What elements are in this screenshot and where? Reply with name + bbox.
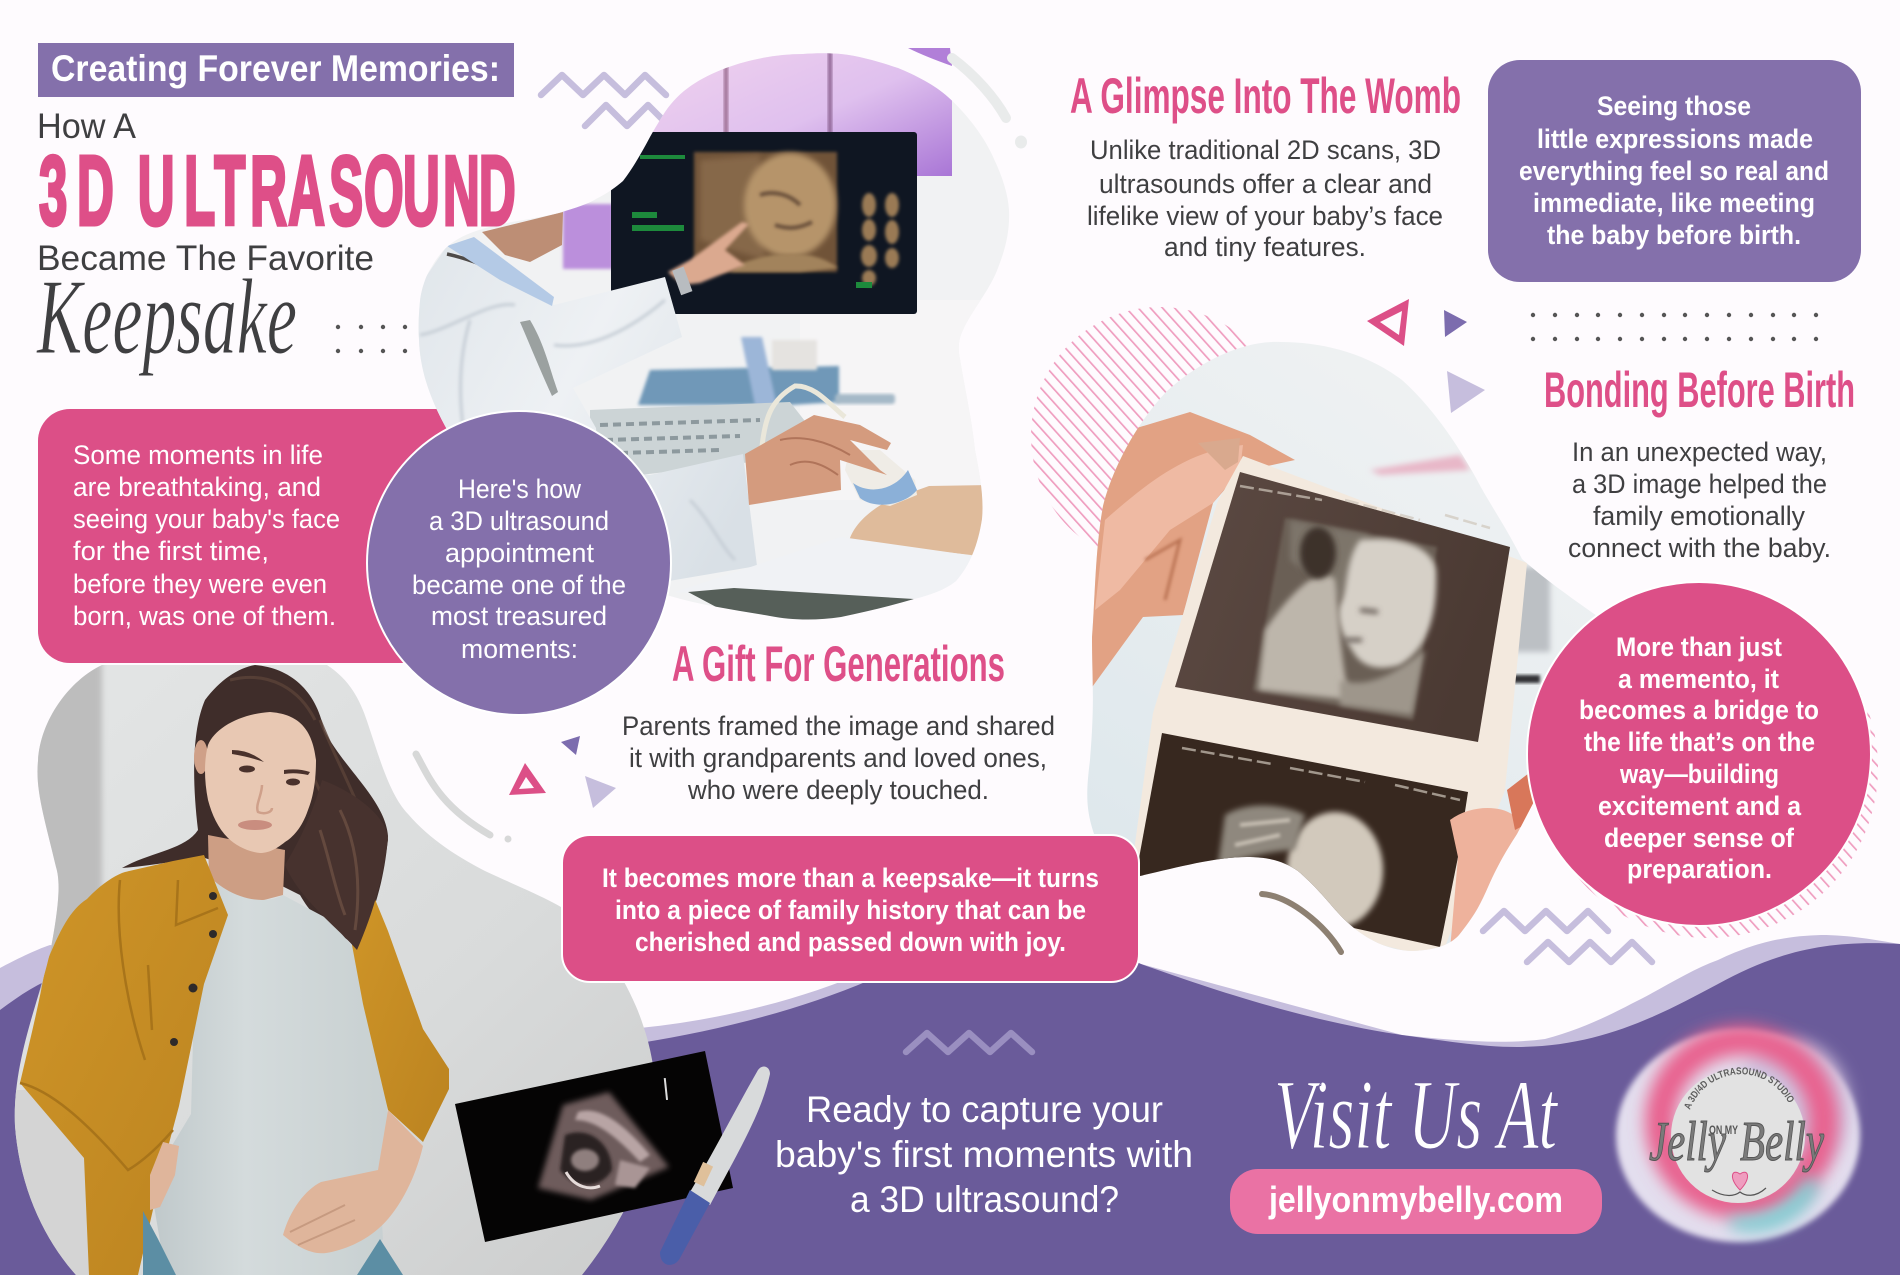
section: Bonding Before Birth: connect with the baby. [1568, 533, 1831, 563]
quote box: Seeing those little expressions: Seeing those [1597, 91, 1751, 121]
section: A Gift For Generations: Parents framed the image and shared [622, 711, 1055, 741]
website pill: jellyonmybelly.com [1268, 1179, 1563, 1220]
baby face top [1339, 539, 1436, 668]
jacket buttons [170, 892, 217, 1046]
title: Became The Favorite: Became The Favorite [37, 239, 374, 278]
zigzag footer [906, 1033, 1032, 1052]
section: Bonding Before Birth [1544, 362, 1855, 563]
cable [762, 386, 845, 446]
hair strands [230, 676, 356, 797]
purple circle callout: became one of the [412, 570, 626, 600]
triangles top right [1367, 299, 1485, 413]
section: A Gift For Generations: A Gift For Generations [672, 636, 1005, 692]
intro text: for the first time, [73, 536, 269, 566]
script: Visit Us At: Visit Us At [1274, 1059, 1558, 1170]
baby face bottom [1287, 812, 1383, 928]
pink circle callout: the life that’s on the [1584, 727, 1815, 757]
triangles center [509, 736, 616, 808]
pink circle callout: More than just [1616, 632, 1782, 662]
lavender wave [0, 900, 1900, 1100]
hand on belly [283, 1110, 423, 1253]
title: 3D ULTRASOUND: 3D ULTRASOUND [39, 135, 516, 246]
section: Bonding Before Birth: In an unexpected way, [1572, 437, 1827, 467]
footer call to action: Ready to capture your [806, 1089, 1163, 1130]
doctor neck [482, 212, 563, 262]
intro text: before they were even [73, 569, 327, 599]
logo: Jelly On My Belly: Belly [1740, 1111, 1824, 1173]
purple footer wave [0, 900, 1900, 1275]
decorative curve and dot center [416, 754, 512, 842]
footer call to action [775, 1089, 1193, 1220]
photo: ultrasound print [455, 1051, 733, 1242]
section: Bonding Before Birth: family emotionally [1593, 501, 1805, 531]
paper [1130, 456, 1527, 960]
hair back [122, 665, 388, 948]
hair front [318, 788, 388, 950]
intro text: seeing your baby's face [73, 504, 340, 534]
zigzag top [541, 75, 669, 126]
section: A Gift For Generations [622, 636, 1055, 805]
intro text: are breathtaking, and [73, 472, 321, 502]
intro text [73, 440, 340, 631]
logo: Jelly On My Belly: A 3D/4D ULTRASOUND STUDIO [1684, 1067, 1794, 1110]
coat shading [420, 300, 735, 560]
quote box: Seeing those little expressions: everything feel so real and [1519, 156, 1829, 186]
quote box: Seeing those little expressions: the baby before birth. [1547, 220, 1801, 250]
title: How A: How A [37, 107, 137, 146]
section: A Gift For Generations: it with grandparents and loved ones, [629, 743, 1047, 773]
ear [194, 740, 208, 774]
top scan [1175, 472, 1510, 742]
pink circle callout: a memento, it [1618, 664, 1779, 694]
pink circle callout: deeper sense of [1604, 823, 1795, 853]
logo: Jelly On My Belly: Jelly [1649, 1111, 1726, 1173]
title band: Creating Forever Memories: [51, 48, 500, 89]
sheet [751, 538, 964, 567]
section: A Gift For Generations: who were deeply touched. [687, 775, 989, 805]
panel: intro text [38, 409, 478, 663]
facial features [232, 750, 310, 786]
jacket folds [20, 880, 218, 1170]
section: A Glimpse Into The Womb [1070, 68, 1461, 262]
jeans [143, 1211, 176, 1275]
hand on probe [745, 415, 891, 505]
hatched circle behind the pink circle [1538, 598, 1878, 938]
pink keepsake box: into a piece of family history that can be [615, 895, 1086, 925]
stand [740, 335, 776, 404]
decorative arc and dot top [952, 58, 1027, 148]
purple circle callout: moments: [461, 634, 578, 664]
zigzag bottom right [1483, 911, 1652, 962]
pink keepsake box: It becomes more than a keepsake—it turns [602, 863, 1099, 893]
monitor [611, 132, 917, 314]
pink circle callout [1527, 582, 1871, 926]
pointing hand [668, 222, 749, 285]
monitor 3D image [694, 152, 837, 272]
hatched circle behind the right photo [1031, 307, 1289, 565]
stethoscope strap [446, 252, 476, 265]
dark cloth [688, 588, 914, 620]
footer call to action: baby's first moments with [775, 1134, 1193, 1175]
purple circle callout [367, 411, 671, 715]
quote box: Seeing those little expressions: little expressions made [1537, 124, 1813, 154]
pink circle callout: way—building [1619, 759, 1779, 789]
purple circle callout: a 3D ultrasound [429, 506, 609, 536]
purple circle callout: most treasured [431, 601, 607, 631]
shirt [150, 879, 388, 1275]
face [205, 712, 316, 853]
collar [447, 237, 554, 306]
monitor thumbnails [861, 193, 899, 286]
purple corner of the top photo [908, 48, 952, 66]
title: Keepsake script: Keepsake [36, 258, 297, 377]
lilac wall panels [650, 40, 952, 176]
pink circle callout: excitement and a [1598, 791, 1802, 821]
probe [845, 450, 917, 506]
jacket right [352, 887, 449, 1142]
purple circle callout: Here's how [458, 474, 581, 504]
belly [850, 485, 982, 556]
neck [208, 835, 285, 905]
decorative arc under right photo [1262, 894, 1341, 952]
dots near Keepsake [336, 325, 407, 353]
section: A Glimpse Into The Womb: ultrasounds offer a clear and [1099, 169, 1432, 199]
intro text: Some moments in life [73, 440, 323, 470]
thumb bottom right [1450, 790, 1540, 950]
hand left [1090, 412, 1295, 690]
doctor coat [418, 246, 757, 580]
logo: Jelly On My Belly [1612, 1014, 1864, 1246]
pink keepsake box: cherished and passed down with joy. [635, 927, 1066, 957]
quote box: Seeing those little expressions [1488, 60, 1861, 282]
monitor green bars [632, 155, 872, 288]
jacket left [20, 855, 228, 1275]
pink circle callout: becomes a bridge to [1579, 695, 1819, 725]
keyboard [590, 402, 808, 475]
footer call to action: a 3D ultrasound? [850, 1179, 1119, 1220]
section: A Glimpse Into The Womb: Unlike traditional 2D scans, 3D [1090, 135, 1441, 165]
dot grid top right [1531, 313, 1818, 341]
section: A Glimpse Into The Womb: A Glimpse Into The Womb [1070, 68, 1461, 124]
pink keepsake box [562, 835, 1139, 982]
pink circle callout: preparation. [1627, 854, 1772, 884]
quote box: Seeing those little expressions: immediate, like meeting [1533, 188, 1815, 218]
photo: pregnant woman [0, 660, 670, 1275]
section: Bonding Before Birth: a 3D image helped the [1572, 469, 1827, 499]
purple circle callout: appointment [445, 538, 594, 568]
website pill [1230, 1169, 1602, 1234]
logo: Jelly On My Belly: ON MY [1709, 1123, 1738, 1137]
intro text: born, was one of them. [73, 601, 336, 631]
icon: pregnancy test [660, 1067, 770, 1265]
photo: doctor performing ultrasound [418, 53, 1009, 620]
photo: hands holding ultrasound prints [1087, 342, 1596, 951]
bottom scan [1135, 733, 1468, 947]
section: A Glimpse Into The Womb: and tiny features. [1164, 232, 1366, 262]
hand on hip [150, 1142, 179, 1210]
section: A Glimpse Into The Womb: lifelike view of your baby’s face [1087, 201, 1443, 231]
console [638, 366, 839, 405]
